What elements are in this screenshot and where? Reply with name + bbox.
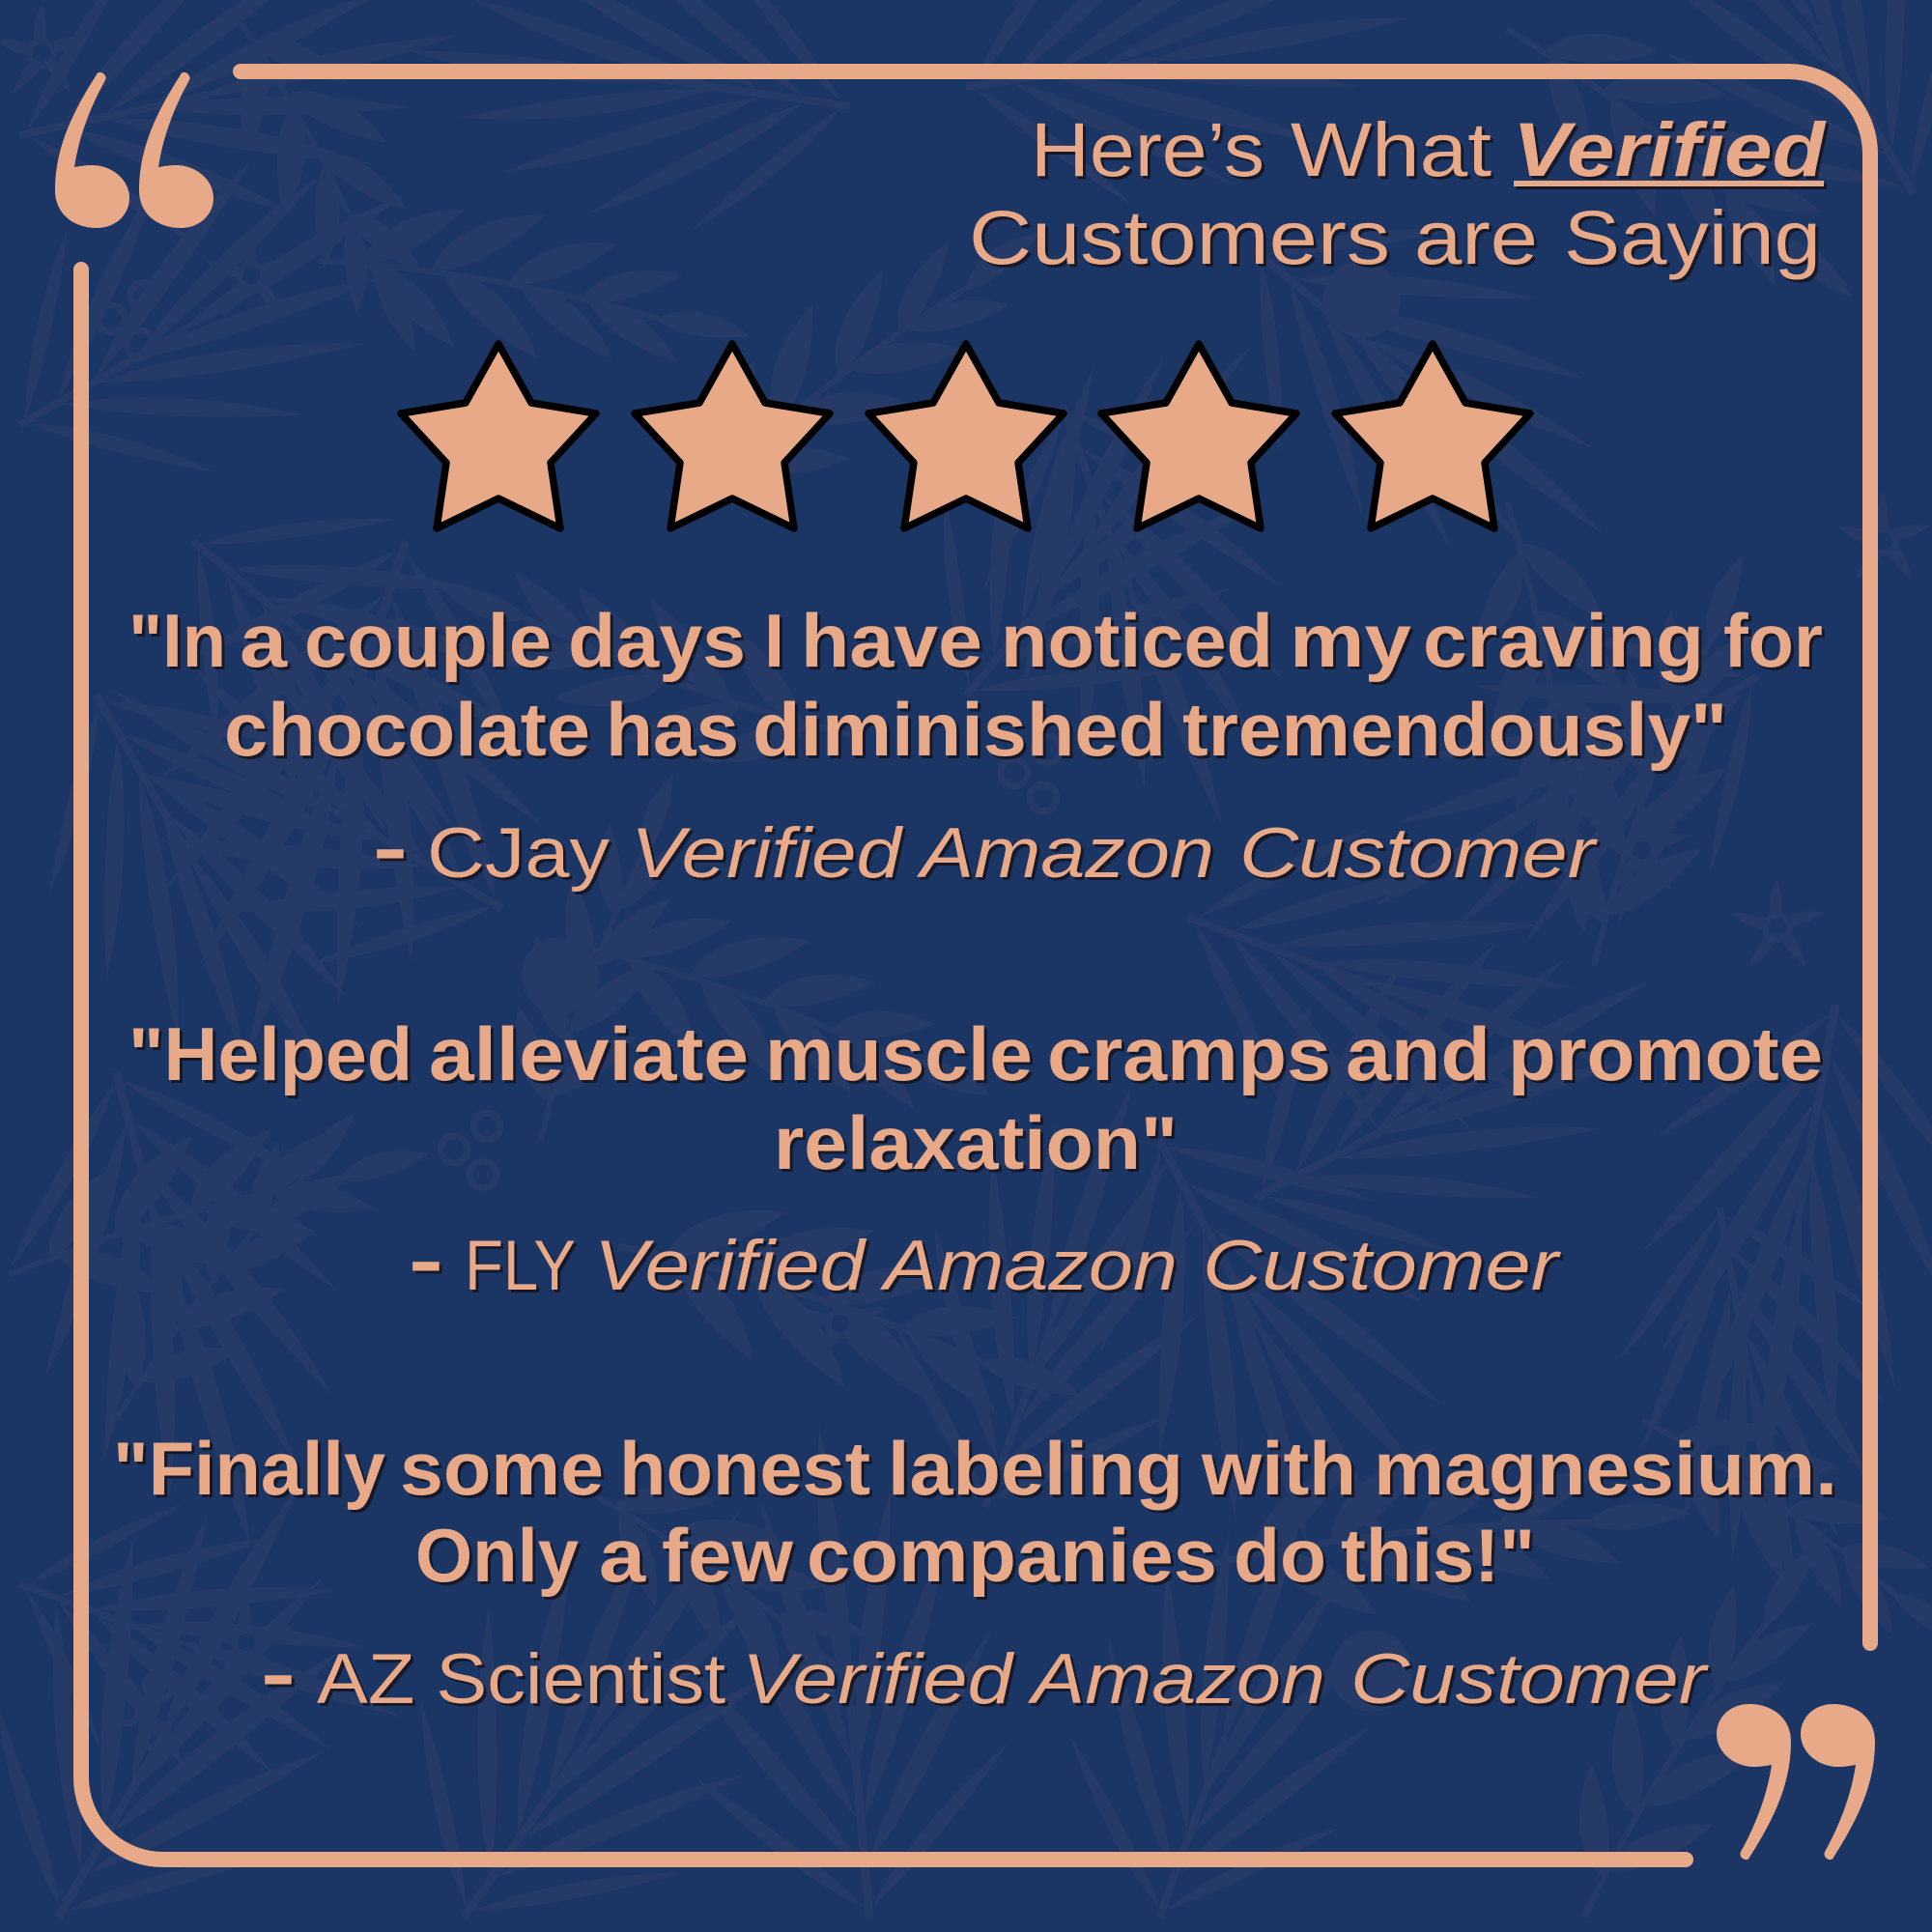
star 4: [1101, 344, 1296, 528]
attribution: Customer: [1350, 1640, 1709, 1719]
quote text: craving: [1423, 598, 1704, 683]
quote text: companies: [807, 1513, 1217, 1598]
icon: opening quotation mark: [55, 72, 213, 228]
quote text: "In: [128, 598, 226, 683]
title: What: [1291, 106, 1492, 192]
attribution: Customer: [1239, 814, 1598, 893]
quote text: tremendously": [1182, 687, 1727, 772]
quote text: Only: [415, 1513, 579, 1598]
quote text: alleviate: [429, 1011, 749, 1096]
quote text: noticed: [1001, 598, 1273, 683]
star 5: [1335, 344, 1530, 528]
attribution: Amazon: [879, 1227, 1178, 1305]
attribution: Verified: [742, 1640, 1015, 1719]
quote text: diminished: [753, 687, 1166, 772]
star 3: [868, 344, 1064, 528]
attribution: -: [373, 805, 408, 890]
attribution: Amazon: [1027, 1640, 1325, 1719]
icon: closing quotation mark: [1717, 1704, 1875, 1860]
title: Here’s: [1031, 106, 1264, 192]
review 3: [113, 1426, 1837, 1719]
quote text: has: [606, 687, 739, 772]
quote text: couple: [304, 598, 552, 683]
quote text: relaxation": [774, 1100, 1178, 1185]
quote text: magnesium.: [1374, 1426, 1837, 1511]
title: Saying: [1564, 194, 1821, 280]
attribution: -: [409, 1217, 443, 1302]
quote text: promote: [1508, 1011, 1823, 1096]
quote text: do: [1234, 1513, 1326, 1598]
attribution: Amazon: [916, 814, 1214, 893]
title: Customers: [969, 194, 1390, 280]
quote text: honest: [619, 1426, 870, 1511]
review 1: [128, 598, 1823, 893]
attribution: -: [261, 1631, 296, 1716]
attribution: Verified: [594, 1227, 867, 1305]
quote text: [113, 1426, 1837, 1598]
frame: bottom and left border: [81, 270, 1686, 1860]
attribution: FLY: [465, 1227, 576, 1305]
quote text: "Helped: [128, 1011, 412, 1096]
quote text: cramps: [1047, 1011, 1331, 1096]
quote text: labeling: [888, 1426, 1183, 1511]
quote text: "Finally: [113, 1426, 385, 1511]
title: Verified: [1513, 106, 1827, 192]
quote text: have: [801, 598, 982, 683]
title: [969, 106, 1827, 280]
quote text: few: [662, 1513, 793, 1598]
attribution: Customer: [1203, 1227, 1561, 1305]
quote text: my: [1290, 598, 1411, 683]
quote text: muscle: [765, 1011, 1033, 1096]
quote text: [128, 598, 1823, 772]
star 1: [401, 344, 596, 528]
attribution: [409, 1217, 1561, 1305]
quote text: for: [1723, 598, 1823, 683]
review 2: [128, 1011, 1823, 1305]
star 2: [635, 344, 830, 528]
frame: top and right border: [241, 71, 1870, 1643]
attribution: CJay: [427, 814, 611, 893]
quote text: with: [1201, 1426, 1356, 1511]
quote text: days: [568, 598, 746, 683]
quote text: and: [1346, 1011, 1491, 1096]
quote text: a: [599, 1513, 646, 1598]
quote text: some: [400, 1426, 604, 1511]
quote text: [128, 1011, 1823, 1185]
quote text: a: [240, 598, 288, 683]
five star rating: [401, 344, 1530, 528]
attribution: [373, 805, 1598, 893]
attribution: [261, 1631, 1709, 1719]
attribution: Verified: [631, 814, 904, 893]
title: are: [1414, 194, 1538, 280]
quote text: this!": [1341, 1513, 1535, 1598]
quote text: chocolate: [224, 687, 590, 772]
attribution: AZ Scientist: [317, 1640, 725, 1719]
quote text: I: [764, 598, 784, 683]
